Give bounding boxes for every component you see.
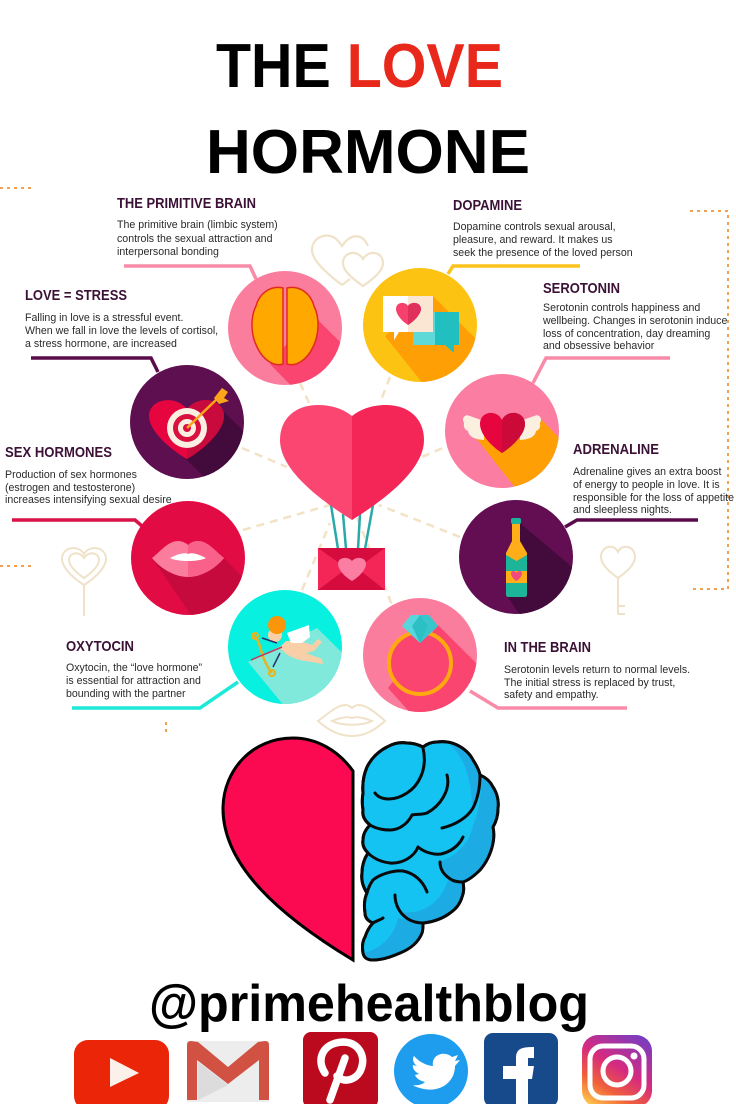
text: sex hormones: Production of sex hormones bbox=[5, 469, 137, 481]
icon: pinterest bbox=[303, 1032, 378, 1104]
text: in the brain: The initial stress is replaced by trust, bbox=[504, 677, 675, 689]
connector bbox=[31, 358, 158, 372]
text: adrenaline: responsible for the loss of appetite bbox=[573, 492, 734, 504]
heading: love = stress: LOVE = STRESS bbox=[25, 287, 127, 304]
icon: instagram bbox=[582, 1035, 652, 1104]
text: in the brain bbox=[504, 664, 690, 701]
illustration: heart and brain bbox=[223, 738, 498, 960]
text: dopamine: pleasure, and reward. It makes us bbox=[453, 234, 613, 246]
icon: cupid bbox=[228, 590, 342, 704]
title: HORMONE bbox=[206, 118, 530, 187]
text: love = stress: Falling in love is a stressful event. bbox=[25, 312, 183, 324]
icon: lips bbox=[131, 501, 245, 615]
icon: gmail bbox=[187, 1041, 269, 1102]
panel: serotonin bbox=[445, 280, 727, 500]
text: oxytocin: Oxytocin, the “love hormone” bbox=[66, 662, 202, 674]
text: the primitive brain: controls the sexual attraction and bbox=[117, 233, 273, 245]
text: serotonin bbox=[542, 302, 727, 352]
central heart with balloon cords bbox=[280, 405, 424, 590]
connector bbox=[565, 520, 698, 527]
icon: chat bubbles bbox=[363, 268, 477, 382]
text: dopamine: Dopamine controls sexual arousal, bbox=[453, 221, 616, 233]
panel: adrenaline bbox=[459, 444, 734, 614]
title bbox=[206, 32, 530, 187]
line art: key right bbox=[601, 547, 635, 615]
connector bbox=[533, 358, 670, 383]
icon: winged heart bbox=[445, 374, 559, 488]
heading: in the brain: IN THE BRAIN bbox=[504, 639, 591, 656]
text: serotonin: Serotonin controls happiness and bbox=[543, 302, 700, 314]
text: oxytocin: bounding with the partner bbox=[66, 688, 186, 700]
panel: the primitive brain bbox=[117, 198, 342, 385]
text: dopamine: seek the presence of the loved person bbox=[453, 247, 633, 259]
social icons bbox=[74, 1032, 652, 1104]
icon: twitter bbox=[394, 1034, 468, 1104]
heading: oxytocin: OXYTOCIN bbox=[66, 638, 134, 655]
panel: oxytocin bbox=[66, 590, 342, 710]
icon: target heart bbox=[130, 365, 244, 479]
text: the primitive brain: interpersonal bonding bbox=[117, 246, 219, 258]
text: in the brain: safety and empathy. bbox=[504, 689, 599, 701]
text: adrenaline: and sleepless nights. bbox=[573, 504, 672, 516]
text: oxytocin bbox=[66, 662, 202, 700]
connector bbox=[12, 520, 142, 526]
text: serotonin: loss of concentration, day dreaming bbox=[543, 328, 710, 340]
line art: heart key left bbox=[62, 548, 106, 616]
heading: serotonin: SEROTONIN bbox=[543, 280, 620, 297]
text: in the brain: Serotonin levels return to normal levels. bbox=[504, 664, 690, 676]
icon: envelope bbox=[318, 548, 385, 590]
text: adrenaline: of energy to people in love. It is bbox=[573, 479, 720, 491]
text: love = stress: When we fall in love the levels of cortisol, bbox=[25, 325, 218, 337]
panel: in the brain bbox=[363, 598, 690, 712]
icon: half heart bbox=[223, 738, 353, 960]
icon: youtube bbox=[74, 1040, 169, 1104]
connector bbox=[72, 682, 238, 708]
text: the primitive brain: The primitive brain (limbic system) bbox=[117, 219, 278, 231]
text: the primitive brain bbox=[117, 219, 278, 258]
connector bbox=[124, 266, 256, 279]
icon: brain bbox=[228, 271, 342, 385]
text: sex hormones bbox=[5, 469, 172, 506]
icon: cords bbox=[331, 505, 373, 549]
text: sex hormones: (estrogen and testosterone) bbox=[5, 482, 135, 494]
panel: dopamine bbox=[363, 200, 632, 382]
text: dopamine bbox=[453, 221, 633, 259]
heading: dopamine: DOPAMINE bbox=[453, 197, 522, 214]
icon: big heart bbox=[280, 405, 424, 520]
text: oxytocin: is essential for attraction and bbox=[66, 675, 201, 687]
icon: ring bbox=[363, 598, 477, 712]
text: serotonin: and obsessive behavior bbox=[543, 340, 655, 352]
text: serotonin: wellbeing. Changes in serotonin induce bbox=[542, 315, 727, 327]
text: love = stress: a stress hormone, are increased bbox=[25, 338, 177, 350]
icon: facebook bbox=[484, 1033, 558, 1104]
line art: hearts bbox=[312, 236, 383, 286]
text: adrenaline bbox=[573, 466, 734, 516]
connector bbox=[448, 266, 580, 274]
heading: sex hormones: SEX HORMONES bbox=[5, 444, 112, 461]
panel: sex hormones bbox=[5, 447, 245, 615]
text: sex hormones: increases intensifying sexual desire bbox=[5, 494, 172, 506]
text: adrenaline: Adrenaline gives an extra boost bbox=[573, 466, 721, 478]
handle: @primehealthblog bbox=[149, 975, 589, 1033]
heading: adrenaline: ADRENALINE bbox=[573, 441, 659, 458]
icon: half brain bbox=[362, 742, 498, 960]
text: love = stress bbox=[25, 312, 218, 350]
connector bbox=[470, 691, 627, 708]
line art: lips bbox=[318, 705, 385, 736]
icon: champagne bottle bbox=[459, 500, 573, 614]
heading: the primitive brain: THE PRIMITIVE BRAIN bbox=[117, 195, 256, 212]
title: THE LOVE bbox=[216, 32, 503, 101]
panel: love = stress bbox=[25, 290, 244, 479]
